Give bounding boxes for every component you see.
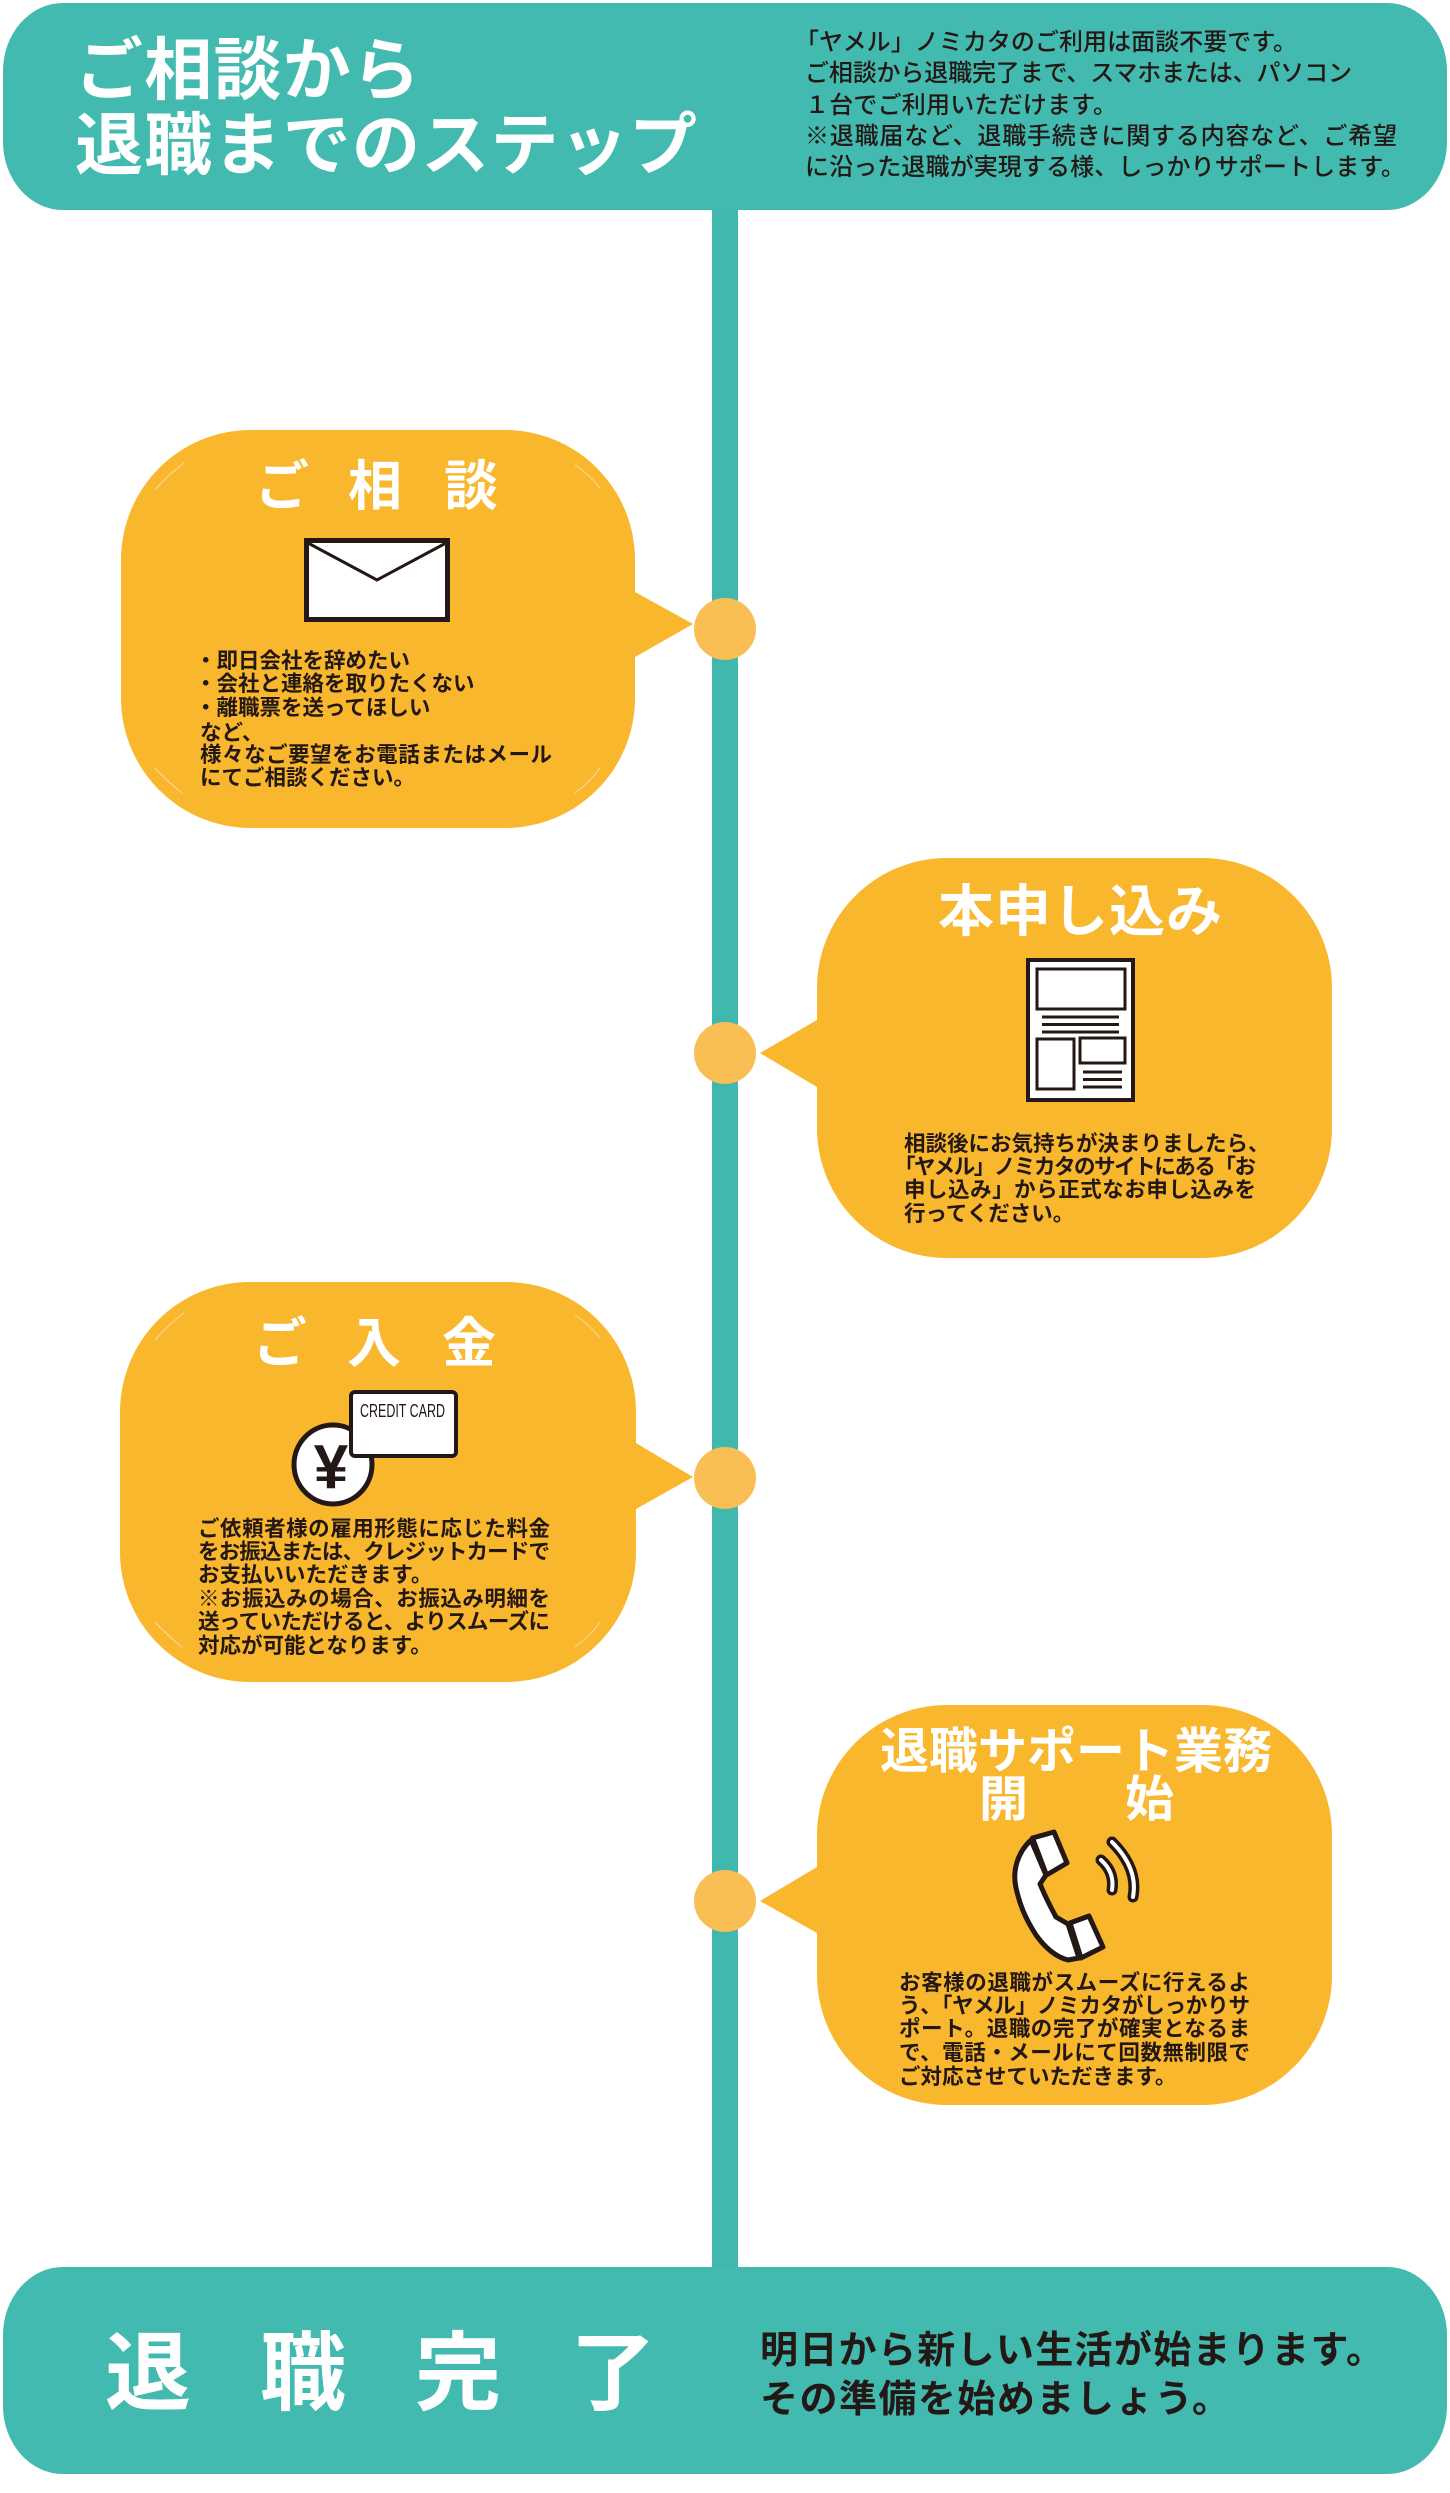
timeline stem (712, 200, 738, 2280)
icon: application form (1028, 960, 1133, 1100)
heading: retirement complete: 退職完了 (105, 2326, 656, 2422)
text block: step 2 (894, 1131, 1270, 1226)
text block: header description: １台でご利用いただけます。 (805, 92, 1117, 119)
icon: coin and credit card (294, 1392, 456, 1504)
bubble shape (760, 858, 1332, 1258)
heading: step 3: ご入金 (253, 1314, 496, 1374)
node: step 3 (694, 1447, 756, 1509)
icon: coin and credit card: CREDIT CARD (360, 1401, 445, 1421)
text block: header description: 「ヤメル」ノミカタのご利用は面談不要です。 (795, 29, 1297, 56)
text block: step 3: をお振込または、クレジットカードで (198, 1540, 550, 1564)
panel: footer banner (3, 2267, 1447, 2474)
text block: step 3: ご依頼者様の雇用形態に応じた料金 (198, 1516, 550, 1541)
text block: step 1: ・離職票を送ってほしい (195, 696, 430, 720)
text block: step 3: 送っていただけると、よりスムーズに (198, 1609, 550, 1634)
text block: step 1 (195, 649, 552, 790)
text block: step 4 (899, 1970, 1250, 2089)
panel: step 2 application (760, 858, 1332, 1258)
icon: envelope (306, 540, 448, 620)
heading: step 4: 退職サポート業務 (880, 1725, 1272, 1779)
heading: title: 退職までのステップ (75, 108, 697, 184)
text block: footer message: その準備を始めましょう。 (760, 2379, 1230, 2421)
text block: step 4: で、電話・メールにて回数無制限で (899, 2041, 1250, 2065)
text block: step 4: ポート。退職の完了が確実となるま (899, 2016, 1250, 2041)
bubble shape (120, 1282, 693, 1682)
text block: step 3: ※お振込みの場合、お振込み明細を (198, 1587, 550, 1611)
text block: header description: に沿った退職が実現する様、しっかりサポートします。 (805, 154, 1405, 181)
bubble shape (121, 430, 693, 828)
text block: footer message: 明日から新しい生活が始まります。 (760, 2330, 1384, 2372)
text block: step 1: にてご相談ください。 (200, 765, 415, 790)
text block: step 2: 「ヤメル」ノミカタのサイトにある「お (894, 1155, 1256, 1179)
panel: step 3 payment (120, 1282, 693, 1682)
heading: step 4: 開始 (979, 1773, 1174, 1827)
text block: step 1: ・会社と連絡を取りたくない (195, 672, 475, 696)
text block: step 2: 行ってください。 (904, 1202, 1074, 1226)
panel: step 4 support start (760, 1705, 1332, 2105)
icon: coin and credit card: ¥ (314, 1433, 349, 1502)
text block: header description: ※退職届など、退職手続きに関する内容など、ご希望 (805, 123, 1397, 150)
text block: step 3: お支払いいただきます。 (198, 1563, 432, 1587)
text block: step 4: う、「ヤメル」ノミカタがしっかりサ (899, 1993, 1250, 2018)
panel: header banner (3, 3, 1447, 210)
node: step 1 (694, 598, 756, 660)
text block: step 3: 対応が可能となります。 (198, 1633, 432, 1658)
text block: step 4: ご対応させていただきます。 (899, 2064, 1176, 2089)
node: step 4 (694, 1870, 756, 1932)
text block: step 1: など、 (200, 721, 263, 745)
icon: telephone (1015, 1832, 1134, 1960)
text block: footer message (760, 2330, 1384, 2421)
heading: title (75, 33, 697, 184)
text block: header description (795, 29, 1405, 181)
text block: header description: ご相談から退職完了まで、スマホまたは、パソコン (805, 60, 1352, 87)
heading: step 1: ご相談 (255, 457, 498, 517)
text block: step 2: 相談後にお気持ちが決まりましたら、 (904, 1131, 1270, 1156)
heading: title: ご相談から (75, 33, 420, 109)
text block: step 2: 申し込み」から正式なお申し込みを (904, 1178, 1256, 1202)
bubble shape (760, 1705, 1332, 2105)
text block: step 4: お客様の退職がスムーズに行えるよ (899, 1970, 1250, 1995)
heading: step 2: 本申し込み (938, 880, 1222, 943)
node: step 2 (694, 1022, 756, 1084)
text block: step 1: ・即日会社を辞めたい (195, 649, 410, 673)
panel: step 1 consultation (121, 430, 693, 828)
heading: step 4 (880, 1725, 1272, 1827)
text block: step 1: 様々なご要望をお電話またはメール (200, 742, 552, 767)
text block: step 3 (198, 1516, 550, 1658)
